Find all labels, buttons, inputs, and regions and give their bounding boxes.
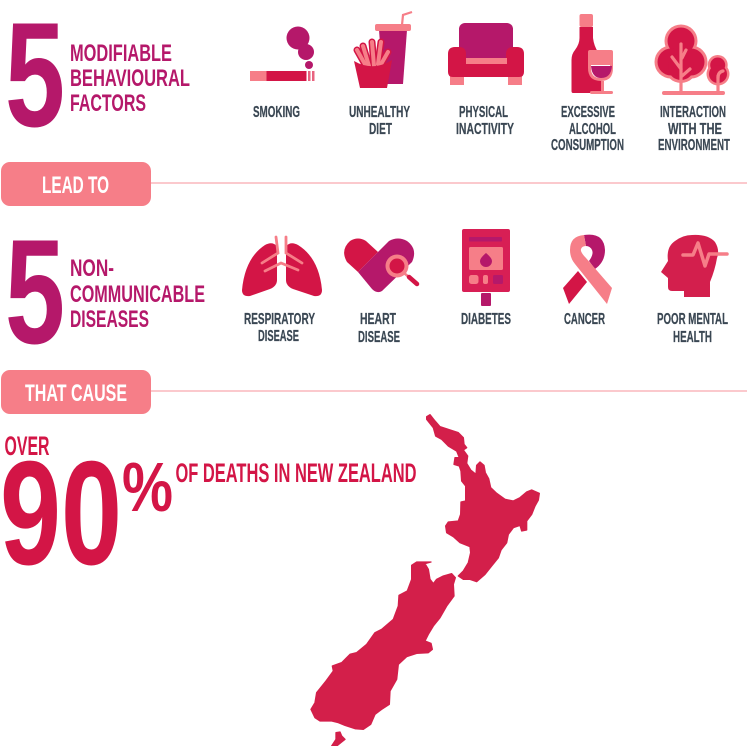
heading: modifiable behavioural factors: MODIFIABLE — [70, 40, 172, 67]
heading: modifiable behavioural factors — [70, 40, 190, 117]
label: interaction with the environment — [658, 104, 730, 154]
heading: modifiable behavioural factors: FACTORS — [70, 90, 146, 117]
label: unhealthy diet — [349, 104, 410, 138]
label: physical inactivity: INACTIVITY — [456, 121, 514, 138]
pill: that cause: THAT CAUSE — [25, 380, 127, 407]
heading: non-communicable diseases: NON- — [70, 255, 114, 282]
label: diabetes: DIABETES — [461, 311, 511, 328]
text: of deaths in New Zealand: OF DEATHS IN NEW ZEALAND — [176, 458, 416, 488]
number 5: diseases: 5 — [5, 208, 65, 375]
icon: cigarette and smoke — [250, 26, 314, 81]
pill: lead to: LEAD TO — [42, 172, 109, 199]
label: respiratory disease: RESPIRATORY — [244, 311, 315, 328]
label: respiratory disease: DISEASE — [258, 328, 299, 345]
label: heart disease: HEART — [360, 311, 396, 328]
label: unhealthy diet: DIET — [369, 121, 392, 138]
label: cancer: CANCER — [564, 311, 605, 328]
heading: non-communicable diseases: COMMUNICABLE — [70, 281, 205, 308]
heading: non-communicable diseases — [70, 255, 205, 333]
icon: glucose meter — [462, 229, 510, 306]
icon: ribbon — [563, 235, 612, 304]
icon: heart with magnifier — [344, 238, 417, 292]
label: excessive alcohol consumption — [551, 104, 624, 154]
icon: lungs — [242, 237, 322, 296]
label: physical inactivity — [456, 104, 514, 138]
label: excessive alcohol consumption: CONSUMPTION — [551, 137, 624, 154]
label: smoking: SMOKING — [253, 104, 300, 121]
label: unhealthy diet: UNHEALTHY — [349, 104, 410, 121]
label: physical inactivity: PHYSICAL — [459, 104, 508, 121]
icon: fries and drink — [354, 12, 412, 88]
icon: wine bottle and glass — [572, 14, 613, 94]
label: respiratory disease — [244, 311, 315, 345]
icon: trees — [654, 24, 730, 95]
icon: head with pulse — [661, 235, 727, 297]
heading: non-communicable diseases: DISEASES — [70, 306, 149, 333]
label: poor mental health: HEALTH — [673, 329, 712, 346]
map: New Zealand — [311, 415, 539, 746]
icon: armchair — [448, 23, 524, 85]
label: poor mental health — [657, 311, 728, 346]
label: heart disease — [358, 311, 400, 346]
label: interaction with the environment: WITH THE — [668, 121, 722, 138]
pill: lead to — [1, 162, 151, 206]
statistic: 90 percent: % — [122, 448, 173, 526]
label: heart disease: DISEASE — [358, 329, 400, 346]
label: excessive alcohol consumption: EXCESSIVE — [561, 104, 615, 121]
pill: that cause — [1, 370, 151, 414]
statistic: 90 percent: 90 — [0, 431, 122, 596]
heading: modifiable behavioural factors: BEHAVIOURAL — [70, 65, 190, 92]
text: over: OVER — [4, 431, 50, 461]
label: excessive alcohol consumption: ALCOHOL — [569, 121, 616, 138]
